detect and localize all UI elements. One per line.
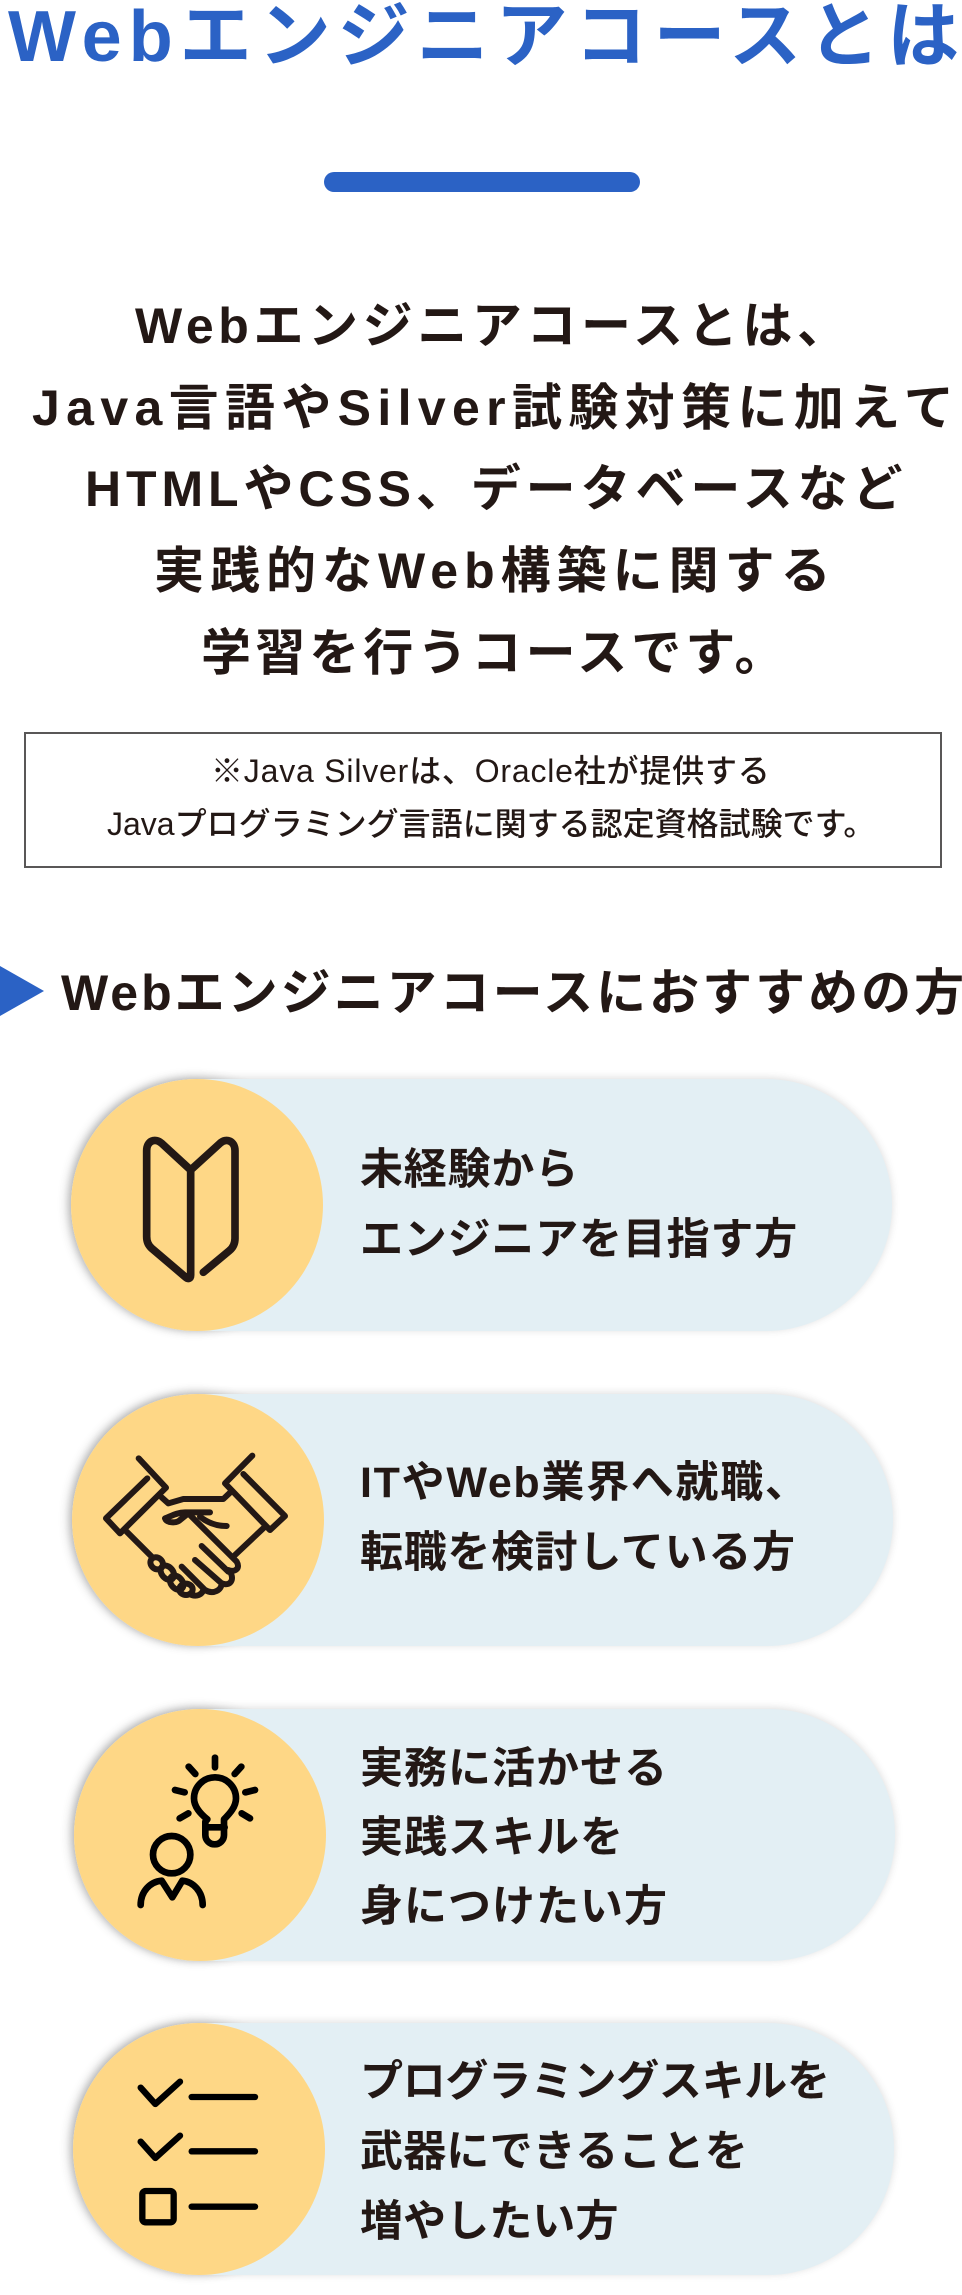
icon: checklist	[138, 2078, 258, 2226]
section heading: Webエンジニアコースにおすすめの方	[61, 965, 962, 1021]
text: recommended 2	[360, 1459, 810, 1577]
note box	[24, 732, 942, 868]
icon: beginner mark	[142, 1136, 239, 1282]
icon circle 1	[71, 1079, 323, 1331]
text: recommended 4: 増やしたい方	[360, 2198, 619, 2246]
note box: Javaプログラミング言語に関する認定資格試験です。	[107, 806, 875, 842]
text: recommended 1: 未経験から	[360, 1146, 579, 1194]
text: recommended 2: 転職を検討している方	[360, 1529, 796, 1577]
text: recommended 1: エンジニアを目指す方	[360, 1216, 798, 1264]
intro text block: Java言語やSilver試験対策に加えて	[32, 380, 960, 436]
text: recommended 3	[360, 1745, 668, 1931]
text: recommended 3: 実践スキルを	[360, 1814, 624, 1862]
icon: handshake	[103, 1452, 288, 1599]
text: recommended 1	[360, 1146, 798, 1264]
text: recommended 4: プログラミングスキルを	[360, 2058, 830, 2106]
intro text block: 学習を行うコースです。	[201, 625, 789, 681]
intro text block: HTMLやCSS、データベースなど	[85, 461, 907, 517]
text: recommended 4: 武器にできることを	[360, 2128, 748, 2176]
text: recommended 4	[360, 2058, 830, 2246]
text: recommended 3: 実務に活かせる	[360, 1745, 668, 1793]
icon: section arrow	[0, 966, 44, 1016]
icon circle 3	[74, 1709, 326, 1961]
icon: person with light bulb	[137, 1754, 258, 1908]
title underline bar	[324, 172, 640, 192]
intro text block: 実践的なWeb構築に関する	[154, 543, 837, 599]
intro text block	[32, 298, 960, 681]
icon circle 4	[73, 2023, 325, 2275]
text: recommended 3: 身につけたい方	[360, 1883, 668, 1931]
intro text block: Webエンジニアコースとは、	[135, 298, 852, 354]
note box: ※Java Silverは、Oracle社が提供する	[211, 753, 771, 789]
text: recommended 2: ITやWeb業界へ就職、	[360, 1459, 810, 1507]
icon circle 2	[72, 1394, 324, 1646]
panel: recommended 2	[64, 1386, 896, 1652]
panel: recommended 1	[62, 1072, 894, 1336]
